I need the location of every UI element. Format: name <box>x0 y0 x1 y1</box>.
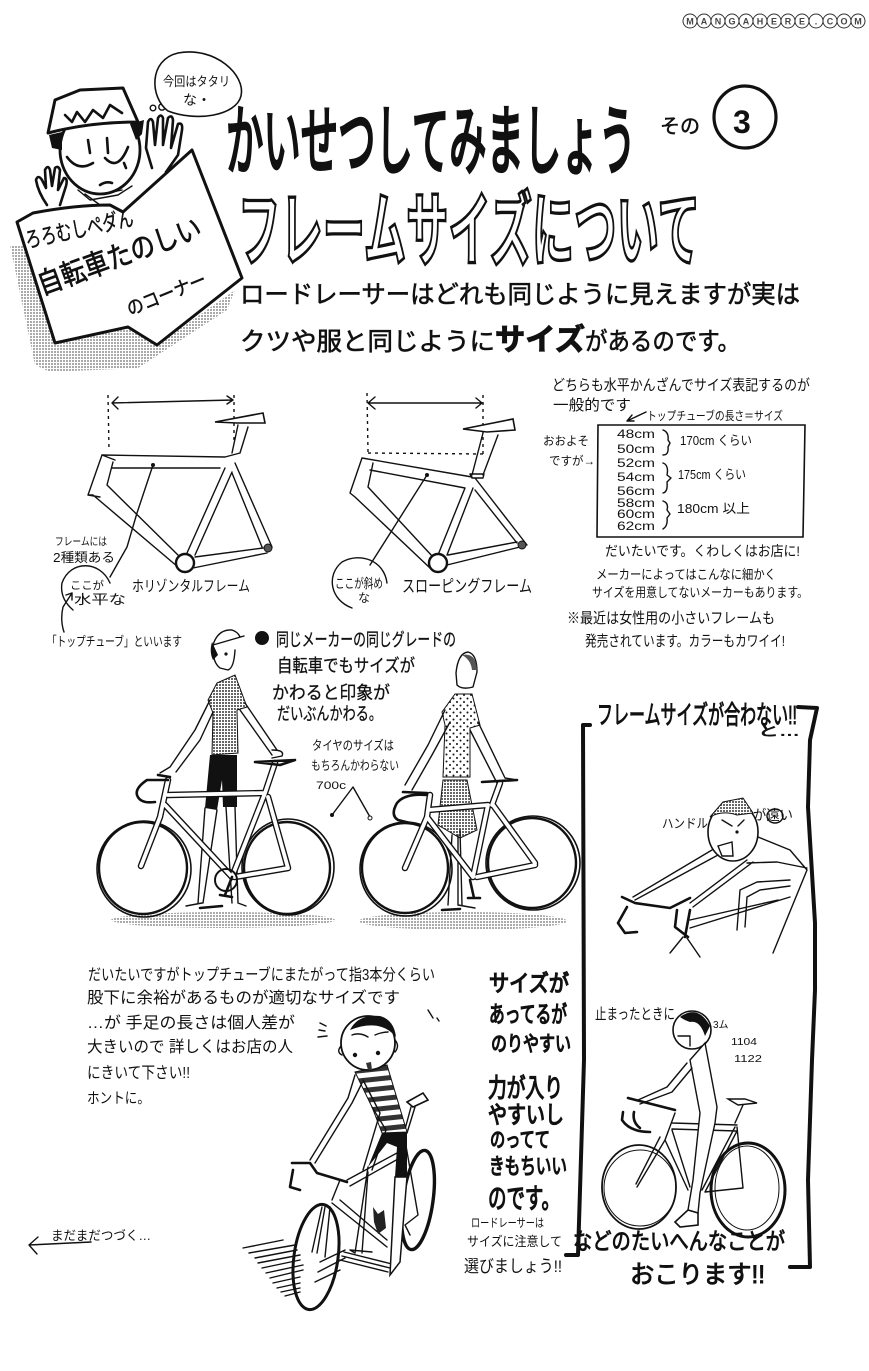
bottom bracket <box>176 554 194 572</box>
arm <box>638 1063 692 1104</box>
mouth <box>718 842 733 856</box>
callout: sloping frame notes <box>332 473 532 608</box>
text: how to judge correct size: だいたいですがトップチューブにまたがって指3本分くらい <box>88 965 435 984</box>
body <box>688 1043 717 1213</box>
bike wheels <box>360 816 580 916</box>
text: same grade note with bullet <box>255 630 456 724</box>
watermark: MANGAHERE.COM: E <box>799 16 805 26</box>
text: benefits of correct size: あってるが <box>489 1001 567 1027</box>
rider dotted shirt <box>442 694 480 777</box>
callout: tire size: タイヤのサイズは <box>312 738 394 753</box>
face details <box>67 138 128 185</box>
table: frame size guide: 62cm <box>617 519 655 533</box>
sign text: 自転車たのしい <box>33 212 206 302</box>
saddle <box>215 413 265 423</box>
title: part number: その <box>660 116 700 138</box>
title: part number <box>660 86 776 148</box>
table: frame size guide: ですが→ <box>549 453 595 468</box>
watermark: MANGAHERE.COM: E <box>771 16 777 26</box>
callout: horizontal frame notes: 「トップチューブ」といいます <box>47 634 182 649</box>
cap <box>48 88 138 133</box>
shirt <box>355 1065 407 1133</box>
table: frame size guide: 54cm <box>617 470 655 484</box>
sign text: ろろむしぺダん <box>23 206 136 253</box>
table: frame size guide <box>543 408 805 537</box>
illustration: rider on oversized bike: 1104 <box>731 1037 758 1048</box>
speech bubble <box>155 52 242 116</box>
dimension guides <box>108 395 234 450</box>
hair <box>680 1012 710 1036</box>
illustration: rider reaching for far handlebar <box>618 798 807 957</box>
sign shadow <box>10 245 235 372</box>
text: benefits of correct size: のです。 <box>488 1183 560 1214</box>
seat post <box>404 1107 415 1133</box>
thigh bar <box>347 1153 398 1186</box>
sign text <box>23 206 210 321</box>
bike frame <box>405 783 535 877</box>
text: caption at panel bottom: などのたいへんなことが <box>573 1228 785 1254</box>
text: benefits of correct size: やすいし <box>488 1102 564 1129</box>
text: benefits of correct size <box>488 970 571 1214</box>
speech bubble: な・ <box>183 92 211 108</box>
text: sizing note: どちらも水平かんざんでサイズ表記するのが <box>552 376 810 394</box>
frame <box>312 1180 387 1257</box>
table: frame size guide: トップチューブの長さ＝サイズ <box>647 408 783 423</box>
rear wheel <box>396 1148 440 1252</box>
label: 止まったときに <box>595 1006 675 1023</box>
front wheel <box>287 1201 345 1313</box>
rider shorts <box>205 755 237 810</box>
text: same grade note with bullet: かわると印象が <box>272 683 390 703</box>
cap zigzag <box>65 105 122 122</box>
text: how to judge correct size: にきいて下さい!! <box>87 1064 190 1082</box>
title: part number: 3 <box>733 104 751 140</box>
label <box>662 807 793 831</box>
text: how to judge correct size: 股下に余裕があるものが適切なサイズです <box>87 989 400 1007</box>
illustration: rider on oversized bike: 1122 <box>734 1054 763 1065</box>
table: frame size guide: 58cm <box>617 496 655 510</box>
callout: horizontal frame notes: 水平な <box>74 592 126 607</box>
mouth <box>366 1062 372 1070</box>
table: frame size guide: 48cm <box>617 427 655 441</box>
shoe <box>675 1210 698 1227</box>
arrow: top tube length <box>112 396 233 409</box>
handlebar <box>622 1098 675 1132</box>
callout: sloping frame notes: な <box>358 591 370 605</box>
illustration: tall rider with large bike <box>97 630 335 928</box>
watermark: MANGAHERE.COM: M <box>686 16 694 26</box>
text: same grade note with bullet: 同じメーカーの同じグレードの <box>276 630 456 650</box>
ground hatch shadow <box>243 1240 392 1296</box>
crank <box>215 869 237 891</box>
text: sizing note <box>552 376 810 414</box>
watermark: MANGAHERE.COM: A <box>701 16 708 26</box>
table: frame size guide: 180cm 以上 <box>677 501 750 516</box>
bottom bracket <box>429 554 447 572</box>
collar <box>78 186 132 205</box>
callout: horizontal frame notes: ここが <box>70 578 104 592</box>
hair <box>710 798 753 817</box>
illustration: short rider with small bike <box>359 652 580 930</box>
rider shirt <box>208 675 247 755</box>
callout: horizontal frame notes: フレームには <box>55 535 107 548</box>
saddle <box>728 1099 757 1105</box>
illustration: host character holding corner sign <box>10 52 242 372</box>
text: notes below table: ※最近は女性用の小さいフレームも <box>567 610 775 627</box>
handlebar <box>618 897 690 937</box>
callout: sloping frame notes: ここが斜め <box>335 576 383 591</box>
table: frame size guide: 170cm くらい <box>680 433 752 448</box>
arrow <box>627 412 646 421</box>
text: same grade note with bullet: だいぶんかわる。 <box>277 704 382 724</box>
intro text: クツや服と同じように <box>240 328 495 356</box>
bracket left <box>566 725 590 1255</box>
intro text: ロードレーサーはどれも同じように見えますが実は <box>240 281 800 309</box>
text: notes below table <box>567 543 808 650</box>
text: choose carefully <box>464 1216 562 1276</box>
bike frame <box>141 763 288 877</box>
diagram: sloping frame <box>350 393 527 572</box>
rider head and cap <box>213 630 244 670</box>
frame tubes <box>350 433 527 568</box>
rider head <box>456 652 477 688</box>
sign text: のコーナー <box>124 270 210 321</box>
panel heading <box>597 700 800 739</box>
saddle <box>255 760 295 765</box>
handlebar <box>137 780 168 802</box>
illustration: boy straddling bike, front view <box>243 1010 440 1313</box>
table: frame size guide: 56cm <box>617 484 655 498</box>
rider shorts <box>438 780 477 838</box>
ground shadow <box>111 912 335 928</box>
watermark: MANGAHERE.COM: . <box>815 16 817 26</box>
face details <box>722 820 744 826</box>
table: frame size guide: おおよそ <box>543 434 589 448</box>
callout: tire size <box>311 738 399 820</box>
chain mark <box>373 1207 386 1234</box>
icon: left hand <box>36 167 67 205</box>
table: frame size guide: 60cm <box>617 507 655 521</box>
panel: when frame size does not fit <box>566 700 817 1289</box>
illustration: rider on oversized bike <box>595 1006 785 1237</box>
stem <box>670 937 700 957</box>
text: how to judge correct size: 大きいので 詳しくはお店の人 <box>87 1038 293 1056</box>
arrow: top tube length <box>368 397 482 409</box>
text: continued with arrow: まだまだつづく… <box>51 1228 151 1243</box>
text: choose carefully: ロードレーサーは <box>471 1216 544 1230</box>
callout: horizontal frame notes: 2種類ある <box>53 550 115 565</box>
text: same grade note with bullet: 自転車でもサイズが <box>277 656 415 676</box>
speech bubble: 今回はタタリ <box>163 74 230 89</box>
watermark: MANGAHERE.COM: C <box>827 16 834 26</box>
watermark: MANGAHERE.COM: R <box>785 16 792 26</box>
watermark: MANGAHERE.COM <box>683 14 865 28</box>
text: notes below table: サイズを用意してないメーカーもあります。 <box>592 585 808 600</box>
text: choose carefully: 選びましょう!! <box>464 1257 562 1276</box>
text: choose carefully: サイズに注意して <box>467 1234 562 1249</box>
face <box>60 106 140 194</box>
right leg <box>390 1177 407 1275</box>
label: ハンドル <box>662 816 708 831</box>
intro text <box>240 281 800 357</box>
text: caption at panel bottom <box>573 1228 785 1289</box>
handlebar <box>394 795 427 823</box>
sound marks: 3ム <box>713 1019 729 1031</box>
label: が遠い <box>753 807 793 823</box>
bracket right <box>790 707 817 1267</box>
head <box>341 1016 395 1070</box>
bike wheels <box>97 819 334 917</box>
callout: horizontal frame notes <box>47 463 250 649</box>
table: frame size guide: 50cm <box>617 442 655 456</box>
saddle <box>482 780 517 782</box>
head <box>708 803 758 861</box>
text: benefits of correct size: サイズが <box>489 970 569 996</box>
table: frame size guide: 52cm <box>617 456 655 470</box>
arms <box>310 1075 386 1170</box>
left leg <box>350 1167 372 1253</box>
icon: right raised hand <box>146 116 182 172</box>
text: caption at panel bottom: おこります!! <box>630 1261 765 1289</box>
text: notes below table: 発売されています。カラーもカワイイ! <box>585 633 785 650</box>
text: sizing note: 一般的です <box>553 397 631 414</box>
hair <box>350 1016 396 1037</box>
shorts <box>368 1132 407 1177</box>
text: how to judge correct size: ホントに。 <box>87 1090 150 1107</box>
diagram: horizontal frame <box>88 395 272 572</box>
subtitle: outlined frame size heading: フレームサイズについて <box>238 186 700 276</box>
wheels <box>602 1143 785 1237</box>
sign sheet <box>17 150 242 345</box>
table: frame size guide: 175cm くらい <box>678 467 746 482</box>
text: notes below table: だいたいです。くわしくはお店に! <box>605 543 800 559</box>
frame <box>636 1105 743 1192</box>
face <box>339 1032 398 1055</box>
hair <box>49 120 144 150</box>
watermark: MANGAHERE.COM: O <box>840 16 848 26</box>
watermark: MANGAHERE.COM: H <box>757 16 763 26</box>
expression marks <box>318 1010 439 1037</box>
callout: tire size: 700c <box>316 780 347 792</box>
text: benefits of correct size: のってて <box>490 1129 550 1152</box>
watermark: MANGAHERE.COM: N <box>715 16 721 26</box>
text: benefits of correct size: のりやすい <box>491 1033 571 1056</box>
saddle <box>463 419 515 432</box>
callout: horizontal frame notes: ホリゾンタルフレーム <box>132 578 250 595</box>
text: how to judge correct size: …が 手足の長さは個人差が <box>87 1014 295 1032</box>
text: benefits of correct size: きもちいい <box>489 1154 567 1179</box>
rider arms and legs <box>405 710 517 908</box>
intro text: があるのです。 <box>585 328 740 356</box>
text: notes below table: メーカーによってはこんなに細かく <box>596 567 776 582</box>
text: benefits of correct size: 力が入り <box>488 1073 563 1103</box>
intro text: サイズ <box>495 323 585 357</box>
text: continued with arrow <box>29 1228 151 1254</box>
rider arms and legs <box>160 700 283 906</box>
rear stay <box>405 1140 418 1235</box>
panel heading: と… <box>758 723 800 739</box>
watermark: MANGAHERE.COM: M <box>854 16 862 26</box>
watermark: MANGAHERE.COM: G <box>728 16 736 26</box>
callout: tire size: もちろんかわらない <box>311 758 399 773</box>
handlebar <box>290 1163 347 1190</box>
saddle <box>407 1093 428 1107</box>
frame tubes <box>88 425 272 568</box>
sweat bubbles <box>150 104 165 111</box>
mouth <box>678 1036 690 1046</box>
callout: sloping frame notes: スローピングフレーム <box>402 577 532 596</box>
watermark: MANGAHERE.COM: A <box>743 16 750 26</box>
title: main heading: かいせつしてみましょう <box>226 100 636 184</box>
ground shadow <box>359 912 567 930</box>
arms and body <box>633 837 807 953</box>
arrow <box>29 1237 91 1254</box>
text: how to judge correct size <box>87 965 435 1107</box>
head <box>673 1011 711 1049</box>
